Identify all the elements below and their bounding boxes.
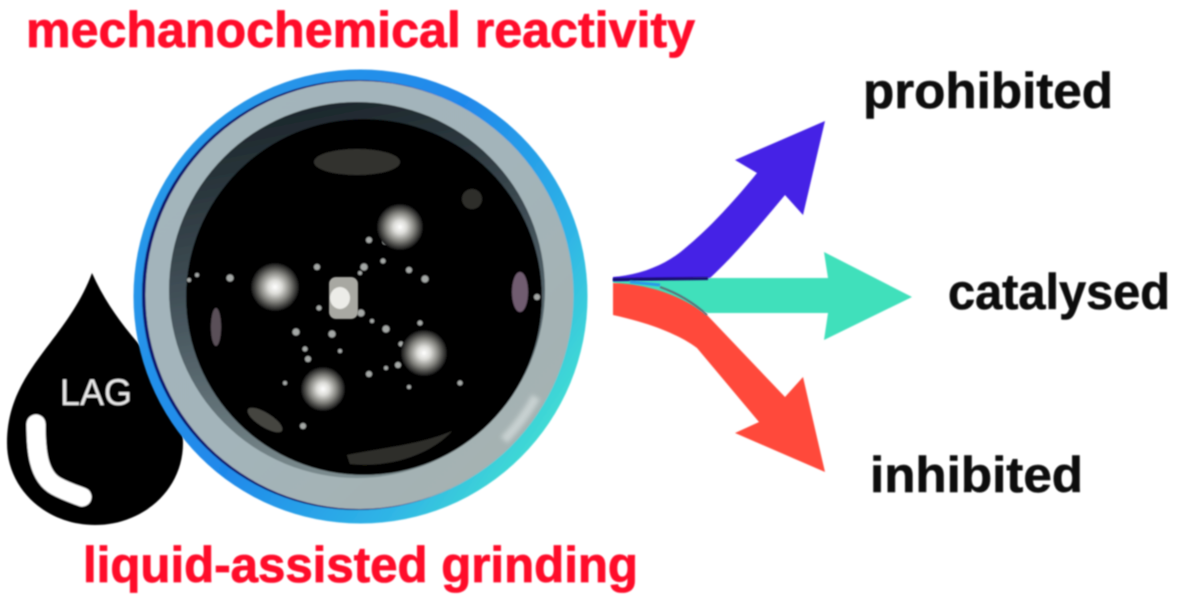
title: mechanochemical reactivity: mechanochemical reactivity — [26, 2, 695, 58]
caption: liquid-assisted grinding: liquid-assisted grinding — [83, 537, 638, 593]
icon: milling jar — [134, 70, 588, 524]
reflection: left — [211, 308, 221, 346]
arrow: catalysed — [613, 252, 912, 340]
label: prohibited: prohibited — [863, 63, 1113, 119]
small particles — [187, 237, 540, 429]
droplet label: LAG — [60, 372, 132, 413]
droplet highlight — [36, 424, 82, 497]
arrow junction shading — [613, 278, 708, 315]
reflection: bottom crescent — [347, 431, 452, 465]
reflection: lower left — [244, 403, 286, 437]
jar rim highlight — [504, 397, 536, 440]
icon: LAG droplet — [7, 273, 183, 525]
label: catalysed: catalysed — [948, 264, 1170, 320]
reflection: upper right spot — [462, 189, 482, 209]
label: inhibited: inhibited — [870, 447, 1083, 503]
reflection: right — [512, 272, 528, 312]
arrow: inhibited — [613, 283, 825, 472]
reflection: top — [314, 149, 400, 175]
grinding balls — [251, 204, 447, 411]
arrow: prohibited — [613, 121, 825, 281]
